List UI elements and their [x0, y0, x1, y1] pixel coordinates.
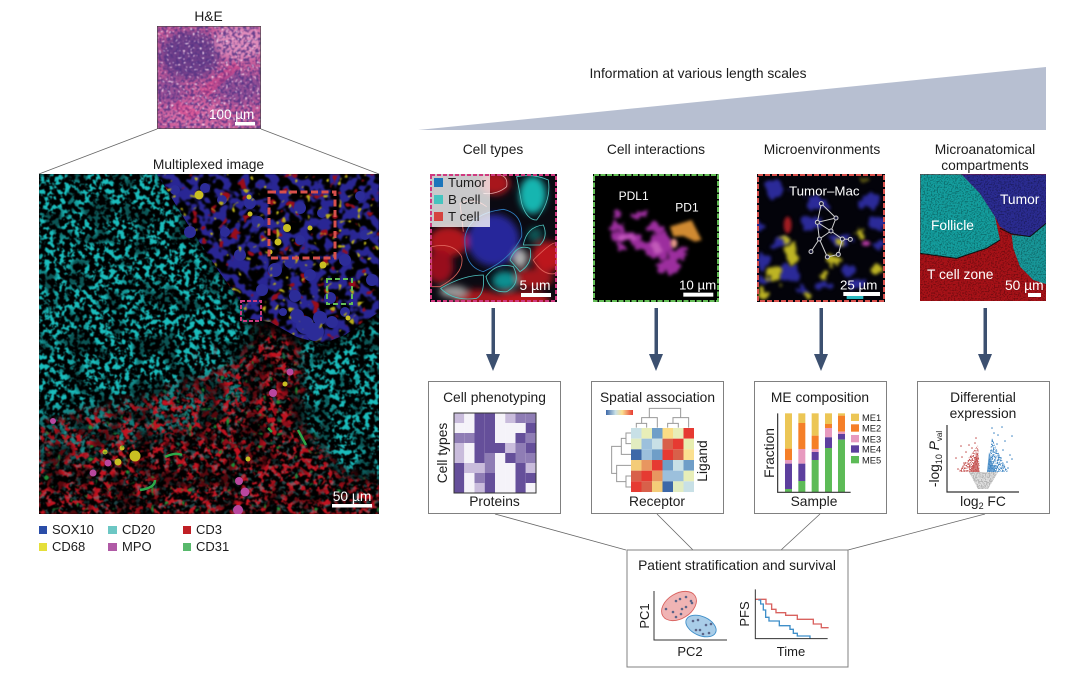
panel: differential expression: Differential [950, 390, 1016, 405]
panel: spatial association: Ligand [695, 440, 710, 482]
image: microanatomical compartments: Tumor [1000, 192, 1040, 207]
image: microenvironments: Tumor–Mac [789, 183, 860, 198]
panel: differential expression [918, 382, 1050, 514]
image: cell interactions [593, 174, 719, 302]
stacked bars: ME3 [862, 434, 881, 444]
panel: ME composition: Sample [791, 494, 838, 509]
image: microenvironments: 25 µm [840, 277, 877, 292]
cell type legend [430, 174, 490, 227]
red T-cell zone [39, 323, 379, 514]
column headings: compartments [941, 158, 1029, 173]
column headings: Microenvironments [764, 142, 880, 157]
panel: patient stratification and survival: Patient stratification and survival [638, 558, 836, 573]
multiplexed image label: Multiplexed image [153, 157, 264, 172]
panel: patient stratification and survival: PC1 [637, 603, 652, 629]
image: cell interactions: PD1 [675, 200, 699, 214]
cell type legend: B cell [448, 192, 481, 207]
panel: ME composition: ME composition [771, 390, 869, 405]
panel: cell phenotyping: Cell types [435, 423, 450, 483]
scale bar: 50 µm [333, 489, 371, 504]
multiplexed image [39, 174, 379, 515]
panel: patient stratification and survival: PC2 [677, 644, 703, 659]
image: microanatomical compartments: T cell zone [927, 267, 994, 282]
H&E image: 100 µm [209, 107, 254, 122]
panel: patient stratification and survival: Time [777, 644, 805, 659]
stacked bars: ME2 [862, 424, 881, 434]
dark voids [39, 174, 379, 514]
blue tumor region [157, 174, 379, 344]
colour scale [606, 410, 633, 415]
stacked bars [778, 413, 881, 492]
marker legend: CD3 [196, 522, 222, 537]
connector lines to patient stratification [495, 514, 985, 550]
panel: differential expression: -log [927, 464, 942, 487]
panel: cell phenotyping [428, 382, 560, 514]
magenta cells [50, 368, 294, 515]
stacked bars: ME1 [862, 413, 881, 423]
H&E label: H&E [194, 9, 223, 24]
panel: differential expression: log [960, 494, 979, 509]
volcano plot [947, 425, 1019, 492]
marker legend: MPO [122, 539, 152, 554]
image: cell types: 5 µm [520, 278, 550, 293]
panel: differential expression: expression [950, 406, 1016, 421]
cell type legend: Tumor [448, 175, 486, 190]
stacked bars: ME5 [862, 455, 881, 465]
arrows [486, 308, 992, 371]
cell type legend: T cell [448, 209, 480, 224]
panel: cell phenotyping: Proteins [469, 494, 520, 509]
panel: spatial association [592, 382, 724, 514]
column headings: Cell interactions [607, 142, 705, 157]
zoom lines from H&E [39, 129, 379, 174]
panel: differential expression: FC [984, 494, 1006, 509]
association heatmap [631, 428, 694, 492]
column headings [463, 142, 1035, 173]
length scale title: Information at various length scales [589, 66, 807, 81]
marker legend [39, 522, 229, 554]
image: cell types [430, 174, 557, 302]
image: microenvironments [756, 174, 885, 302]
panel: patient stratification and survival: PFS [737, 601, 752, 627]
panel: differential expression: P [927, 440, 942, 454]
column headings: Microanatomical [935, 142, 1035, 157]
yellow macrophages [164, 174, 379, 342]
PCA scatter [654, 585, 727, 641]
stacked bars: ME4 [862, 445, 881, 455]
survival curves [755, 589, 829, 639]
panel: patient stratification and survival [627, 550, 848, 667]
marker legend: CD31 [196, 539, 229, 554]
cyan follicle [39, 174, 379, 514]
phenotyping heatmap [454, 413, 536, 493]
panel: spatial association: Receptor [629, 494, 685, 509]
H&E image [156, 24, 266, 129]
column headings: Cell types [463, 142, 523, 157]
image: microanatomical compartments: Follicle [931, 218, 974, 233]
panel: cell phenotyping: Cell phenotyping [443, 390, 546, 405]
length scale wedge [418, 67, 1046, 130]
marker legend: SOX10 [52, 522, 94, 537]
marker legend: CD68 [52, 539, 85, 554]
marker legend: CD20 [122, 522, 155, 537]
image: cell interactions: PDL1 [619, 189, 649, 203]
panel: spatial association: Spatial association [600, 390, 715, 405]
image: cell interactions: 10 µm [679, 277, 716, 292]
panel: differential expression: 2 [979, 501, 984, 511]
dendrograms [612, 408, 689, 487]
image: microanatomical compartments [920, 174, 1046, 301]
green vessels [39, 329, 379, 514]
panel: ME composition [754, 382, 886, 514]
dashed region boxes [269, 192, 335, 258]
image: microanatomical compartments: 50 µm [1005, 278, 1044, 293]
panel: differential expression: 10 [934, 454, 944, 464]
panel: ME composition: Fraction [762, 428, 777, 478]
panel: differential expression: val [935, 431, 944, 441]
